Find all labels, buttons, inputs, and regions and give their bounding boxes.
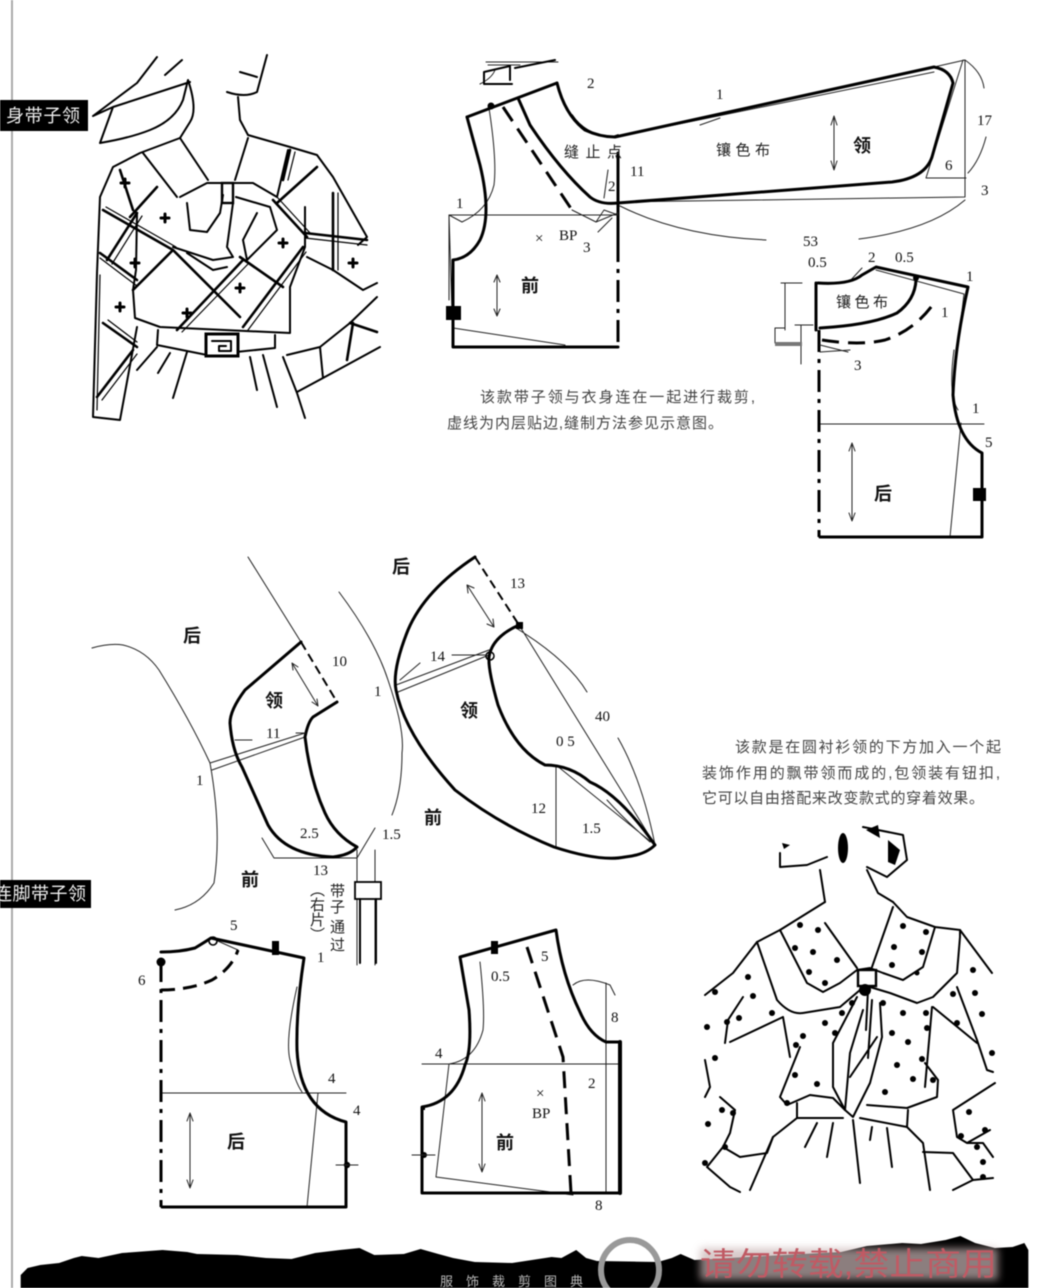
pattern labels: 3 — [854, 358, 862, 374]
pattern: front bodice with extended collar — [446, 60, 992, 347]
face and hair — [780, 827, 907, 902]
pattern: back bodice with contrast neck — [775, 234, 992, 537]
pattern: collar back piece right — [374, 557, 655, 858]
pattern labels: 片 — [310, 912, 325, 929]
pattern labels: 前 — [424, 808, 442, 828]
pattern labels: BP — [532, 1106, 550, 1122]
pattern labels: 0.5 — [808, 255, 827, 271]
pattern: lower front bodice — [412, 930, 620, 1214]
pattern labels: 领 — [265, 691, 283, 711]
pattern labels: 8 — [595, 1198, 602, 1214]
pattern labels: 子 — [330, 899, 345, 916]
text block: upper pattern note: 该款带子领与衣身连在一起进行裁剪, — [480, 389, 755, 406]
illustration: woman with plaid blouse and tied collar — [93, 55, 380, 420]
pattern labels: 领 — [460, 701, 478, 721]
right cuff — [923, 1083, 995, 1190]
pattern labels: 1 — [374, 684, 382, 700]
pattern labels: 1.5 — [382, 827, 401, 843]
pattern labels: 1.5 — [582, 821, 601, 837]
pattern labels: 后 — [227, 1132, 245, 1152]
illustration: woman with polka-dot blouse and bow — [702, 825, 995, 1192]
bow — [173, 195, 277, 270]
text block: upper pattern note: 虚线为内层贴边,缝制方法参见示意图。 — [447, 414, 723, 432]
pattern labels: 6 — [138, 973, 146, 989]
pattern: collar back piece left — [92, 557, 402, 965]
pattern labels: 2 — [868, 250, 876, 266]
pattern labels: 前 — [496, 1133, 514, 1153]
collar — [757, 902, 860, 1013]
skirt folds — [137, 347, 305, 418]
neck, collar and shoulders — [93, 138, 180, 420]
plaid stripes — [97, 150, 367, 397]
pattern labels: 0 5 — [556, 734, 575, 750]
pattern labels: 1 — [972, 401, 980, 417]
pattern labels: 1 — [317, 950, 324, 966]
pattern labels: 0.5 — [895, 250, 914, 266]
text block: lower note: 该款是在圆衬衫领的下方加入一个起 — [735, 739, 1001, 756]
hair and face — [93, 57, 194, 143]
text block: lower note: 它可以自由搭配来改变款式的穿着效果。 — [702, 789, 984, 807]
pattern labels: 12 — [531, 801, 546, 817]
pattern labels: 6 — [945, 158, 953, 174]
plaid motifs — [116, 179, 357, 317]
pattern labels: 13 — [313, 863, 328, 879]
blouse outline — [133, 207, 305, 333]
pattern labels: 10 — [332, 654, 347, 670]
pattern labels: 前 — [521, 276, 539, 296]
pattern labels: 1 — [456, 196, 464, 212]
pattern labels: 带 — [330, 883, 345, 900]
pattern labels: 2.5 — [300, 826, 319, 842]
pattern labels: 14 — [430, 649, 446, 665]
sleeves and body — [705, 942, 790, 1057]
pattern labels: 1 — [196, 773, 204, 789]
text block: upper pattern note — [447, 389, 755, 432]
polka dots — [702, 922, 995, 1180]
footer: black skyline banner — [21, 1236, 1028, 1288]
pattern labels: 11 — [630, 164, 644, 180]
label: upper section tag: 身带子领 — [6, 106, 80, 126]
pattern labels: 13 — [510, 576, 525, 592]
pattern labels: 11 — [266, 726, 280, 742]
pattern labels: 17 — [977, 113, 992, 129]
pattern labels: 4 — [328, 1071, 336, 1087]
pattern labels: 40 — [595, 709, 610, 725]
pattern labels: 5 — [985, 435, 992, 451]
pattern labels: 3 — [583, 240, 590, 256]
watermark: red notice: 请勿转载,禁止商用 — [700, 1246, 997, 1282]
pattern labels — [374, 557, 610, 837]
label: lower section tag — [0, 880, 91, 908]
pattern labels: 5 — [541, 949, 548, 965]
pattern labels: 0.5 — [491, 969, 510, 985]
pattern labels: 镶色布 — [716, 141, 770, 159]
pattern labels: 1 — [966, 269, 974, 285]
pattern labels: ︵ — [310, 882, 325, 899]
pattern labels: × — [536, 1086, 544, 1102]
text block: lower note: 装饰作用的飘带领而成的,包领装有钮扣, — [702, 765, 1000, 782]
pattern labels: 领 — [853, 136, 871, 156]
pattern labels: 后 — [183, 626, 201, 646]
pattern labels: 过 — [330, 937, 345, 954]
pattern labels: 8 — [611, 1010, 618, 1026]
belt and skirt — [750, 1103, 930, 1190]
pattern labels: 后 — [874, 484, 892, 504]
left cuff — [705, 1060, 773, 1192]
pattern labels: 1 — [716, 87, 724, 103]
pattern: lower back bodice — [138, 918, 361, 1207]
pattern labels — [183, 626, 401, 954]
pattern labels: × — [535, 231, 543, 247]
pattern labels: 5 — [230, 918, 238, 934]
pattern labels: 4 — [435, 1046, 443, 1062]
pattern labels: 53 — [803, 234, 818, 250]
pattern labels: 后 — [392, 557, 410, 577]
watermark: circular stamp — [601, 1240, 659, 1288]
pattern labels: 2 — [587, 76, 594, 92]
pattern labels — [803, 234, 992, 504]
pattern labels: 4 — [353, 1103, 361, 1119]
text block: lower note — [702, 739, 1001, 807]
bow ties — [833, 990, 882, 1117]
pattern labels: 前 — [241, 870, 259, 890]
pattern labels — [435, 949, 618, 1214]
pattern labels: ︶ — [310, 927, 325, 944]
right forearm and cuff — [287, 257, 380, 392]
label: upper section tag — [0, 100, 88, 131]
belt — [157, 330, 275, 356]
pattern labels: 1 — [941, 305, 948, 321]
pattern labels: 右 — [310, 897, 325, 914]
pattern labels: BP — [559, 228, 577, 244]
pattern labels: 3 — [981, 183, 988, 199]
pattern labels: 通 — [330, 919, 345, 936]
pattern labels: 2 — [608, 179, 616, 195]
pattern labels — [138, 918, 361, 1152]
pattern labels: 2 — [588, 1076, 596, 1092]
pattern labels: 镶色布 — [836, 293, 888, 311]
pattern labels — [456, 76, 992, 296]
pattern labels: 缝止点 — [564, 144, 622, 161]
